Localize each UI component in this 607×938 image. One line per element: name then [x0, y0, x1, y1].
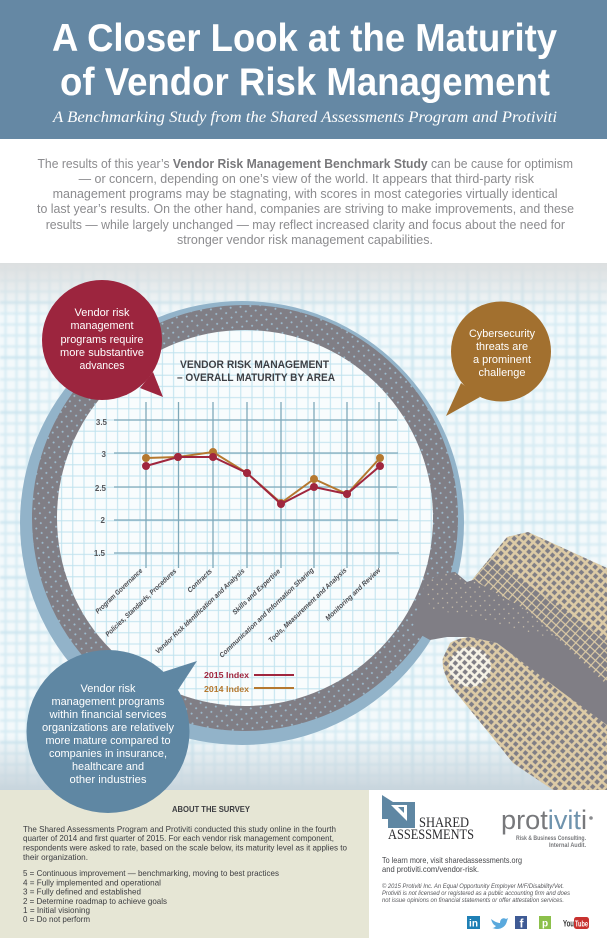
category labels — [95, 566, 383, 659]
lens surface — [54, 326, 438, 710]
maturity scale: 0 = Do not perform — [23, 914, 90, 924]
icon: facebook: f — [520, 916, 524, 930]
about heading: ABOUT THE SURVEY — [172, 804, 250, 814]
maturity scale — [23, 868, 279, 924]
magnifier handle — [412, 572, 607, 725]
callout: financial services: companies in insurance, — [49, 748, 167, 760]
maturity scale: 4 = Fully implemented and operational — [23, 878, 161, 888]
chart title: – OVERALL MATURITY BY AREA — [177, 372, 335, 384]
category labels: Policies, Standards, Procedures — [105, 568, 178, 638]
line chart — [94, 359, 399, 694]
maturity scale: 1 = Initial visioning — [23, 905, 90, 915]
about paragraph: The Shared Assessments Program and Protiviti conducted this study online in the fourth — [23, 824, 336, 834]
copyright notice: © 2015 Protiviti Inc. An Equal Opportunity Employer M/F/Disability/Vet. — [382, 882, 564, 890]
category labels: Vendor Risk Identification and Analysis — [155, 568, 246, 655]
protiviti logo: Internal Audit. — [549, 843, 586, 849]
icon: linkedin: in — [469, 918, 478, 930]
y axis labels: 3.5 — [96, 418, 108, 427]
y axis labels: 3 — [102, 450, 107, 459]
about paragraph: their organization. — [23, 852, 88, 862]
about the survey text — [23, 804, 347, 924]
category labels: Skills and Expertise — [232, 568, 282, 616]
magnifying glass — [20, 301, 464, 745]
callout: financial services — [26, 650, 197, 813]
category labels: Contracts — [187, 568, 214, 594]
icon: youtube — [563, 917, 589, 929]
title: of Vendor Risk Management — [60, 61, 550, 104]
y axis labels: 2.5 — [95, 484, 107, 493]
intro text block: — or concern, depending on one’s view of the world. It appears that third-party risk — [79, 172, 535, 186]
protiviti logo: Risk & Business Consulting. — [516, 836, 586, 842]
intro text block: to last year’s results. On the other hand, companies are striving to make improvements, and these — [37, 202, 574, 216]
shared assessments logo: SHARED — [419, 815, 469, 831]
about paragraph — [23, 824, 347, 862]
icon: p badge: p — [542, 918, 548, 930]
copyright notice: not issue opinions on financial statements or offer attestation services. — [382, 897, 564, 904]
contact panel background — [369, 790, 607, 938]
title: A Closer Look at the Maturity — [52, 17, 557, 60]
about paragraph: quarter of 2014 and first quarter of 2015. For each vendor risk management component, — [23, 833, 334, 843]
about paragraph: respondents were asked to rate, based on the scale below, its maturity level as it applies to — [23, 842, 347, 852]
category labels: Tools, Measurement and Analysis — [268, 567, 349, 644]
learn more text — [382, 855, 522, 874]
blue lens rim — [20, 301, 464, 745]
callout: cybersecurity: a prominent — [473, 354, 531, 366]
shared assessments logo — [382, 795, 474, 843]
icon: youtube: You — [563, 918, 574, 928]
callout: financial services: Vendor risk — [80, 683, 136, 695]
halftone gray ring — [44, 318, 446, 718]
y axis labels: 2 — [101, 516, 106, 525]
callout: financial services: organizations are relatively — [42, 722, 174, 734]
callout: cybersecurity: challenge — [478, 367, 526, 379]
learn more text: and protiviti.com/vendor-risk. — [382, 864, 479, 874]
header banner — [0, 0, 607, 139]
callout: financial services: within financial services — [48, 709, 167, 721]
2015 index line — [142, 453, 384, 508]
callout: financial services: other industries — [70, 774, 147, 786]
callout: cybersecurity: Cybersecurity — [469, 328, 535, 340]
protiviti logo — [501, 805, 593, 849]
graph paper background — [0, 263, 607, 790]
intro text block: results — while largely unchanged — may reflect increased clarity and focus about the need for — [46, 218, 565, 232]
subtitle: A Benchmarking Study from the Shared Assessments Program and Protiviti — [52, 109, 557, 126]
y axis labels: 1.5 — [94, 549, 106, 558]
intro text block: stronger vendor risk management capabilities. — [177, 233, 433, 247]
hand holding magnifier — [412, 532, 607, 790]
intro text block — [37, 157, 574, 247]
callout: financial services: healthcare and — [72, 761, 144, 773]
category labels: Communication and Information Sharing — [219, 566, 316, 659]
callout: financial services: management programs — [52, 696, 165, 708]
icon: twitter — [491, 918, 508, 929]
chart title — [177, 359, 335, 384]
intro text block: management programs may be stagnating, with scores in most categories virtually identical — [53, 187, 558, 201]
shared assessments logo: ASSESSMENTS — [388, 827, 474, 843]
intro text block: The results of this year’s Vendor Risk Management Benchmark Study can be cause for optimism — [38, 157, 573, 171]
maturity scale: 3 = Fully defined and established — [23, 886, 141, 896]
callout: cybersecurity — [446, 302, 551, 416]
category labels: Monitoring and Review — [325, 567, 383, 622]
legend: 2015 Index — [204, 670, 249, 680]
legend: 2014 Index — [204, 684, 249, 694]
maturity scale: 5 = Continuous improvement — benchmarking, moving to best practices — [23, 868, 279, 878]
chart grid — [114, 402, 399, 568]
copyright notice: Protiviti is not licensed or registered as a public accounting firm and does — [382, 890, 571, 897]
finger — [443, 637, 607, 790]
callout: vendor risk programs: more substantive — [60, 347, 144, 359]
callout: vendor risk programs: Vendor risk — [74, 307, 130, 319]
callout: vendor risk programs: programs require — [60, 334, 144, 346]
social icons — [467, 916, 589, 930]
category labels: Program Governance — [95, 568, 144, 615]
copyright notice — [382, 882, 571, 904]
legend — [204, 670, 294, 694]
callout: cybersecurity: threats are — [476, 341, 528, 353]
icon: youtube: Tube — [575, 918, 588, 928]
y axis labels — [94, 418, 108, 558]
callout: vendor risk programs: advances — [80, 360, 125, 372]
callout: vendor risk programs: management — [70, 320, 134, 332]
palm — [472, 532, 607, 700]
survey panel — [0, 790, 369, 938]
fingernail highlight — [449, 647, 491, 687]
callout: financial services: more mature compared to — [46, 735, 170, 747]
maturity scale: 2 = Determine roadmap to achieve goals — [23, 896, 167, 906]
title — [52, 17, 557, 104]
protiviti logo: protiviti — [501, 805, 587, 835]
2014 index line — [142, 448, 384, 507]
chart title: VENDOR RISK MANAGEMENT — [180, 359, 329, 371]
learn more text: To learn more, visit sharedassessments.org — [382, 855, 522, 865]
callout: vendor risk programs — [42, 280, 163, 400]
